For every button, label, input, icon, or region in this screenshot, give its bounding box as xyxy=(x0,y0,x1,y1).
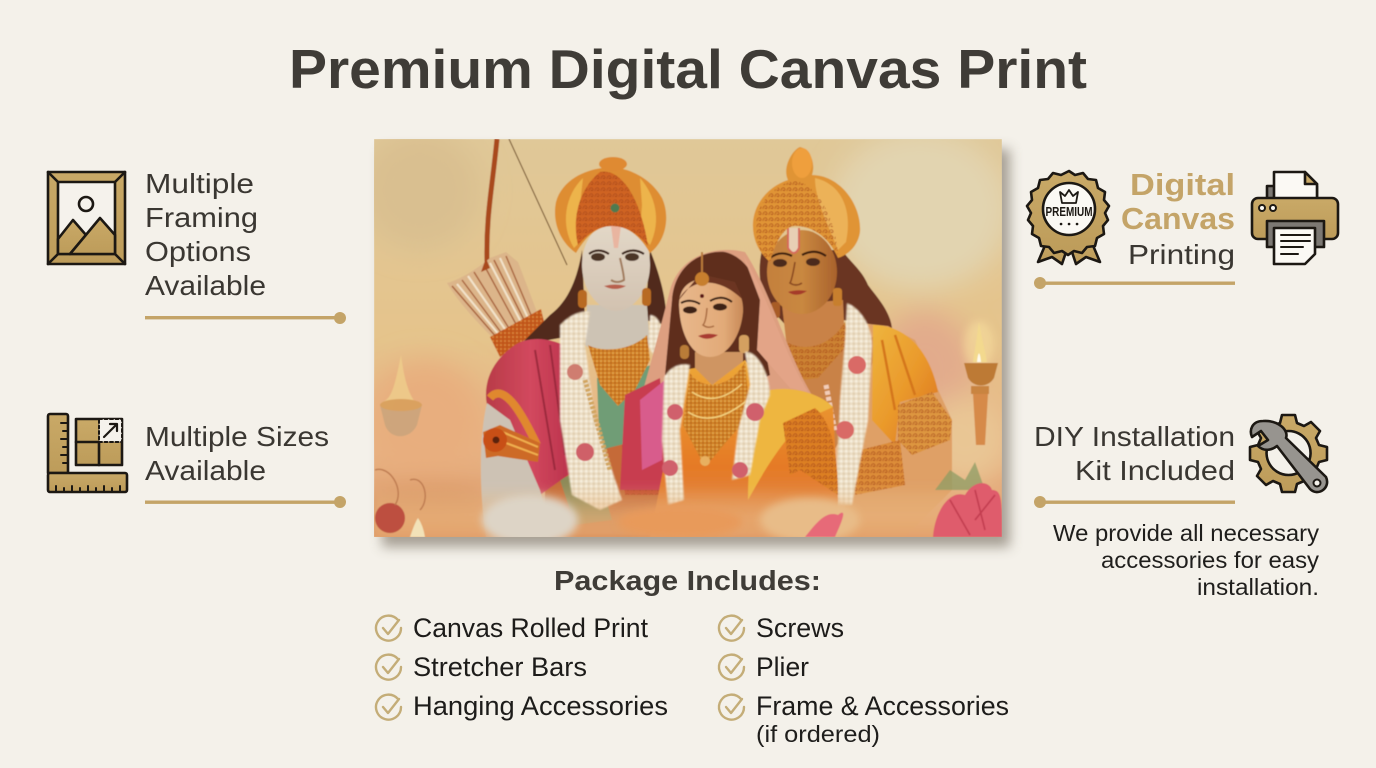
painting: centre figure xyxy=(620,250,838,537)
connector line xyxy=(145,312,346,324)
painting: right figure xyxy=(753,147,952,537)
text: digital canvas printing: Canvas xyxy=(1121,201,1235,236)
item: canvas rolled print: Canvas Rolled Print xyxy=(413,613,649,643)
item: frame and accessories: (if ordered) xyxy=(756,721,880,747)
painting: right lamp xyxy=(964,321,998,445)
item: screws: Screws xyxy=(756,613,844,643)
text: multiple sizes available: Available xyxy=(145,455,266,486)
panel: sizes xyxy=(48,414,346,508)
painting: bottom mist and flowers xyxy=(374,462,1002,545)
text: accessories note: We provide all necessary xyxy=(1053,520,1320,546)
connector line xyxy=(1034,277,1235,289)
heading: package includes: Package Includes: xyxy=(554,565,821,596)
text: digital canvas printing: Printing xyxy=(1128,239,1235,270)
icon: ruler and size grid xyxy=(48,414,127,492)
text: multiple framing options: Available xyxy=(145,270,266,301)
icon: printer xyxy=(1252,172,1338,264)
text: accessories note xyxy=(1053,520,1320,600)
connector line xyxy=(145,496,346,508)
item: stretcher bars: Stretcher Bars xyxy=(413,652,587,682)
text: DIY installation kit included: DIY Installation xyxy=(1034,421,1235,452)
text: multiple sizes available xyxy=(145,421,329,486)
item: plier: Plier xyxy=(756,652,809,682)
item: screws xyxy=(719,613,844,643)
text: multiple framing options: Options xyxy=(145,236,251,267)
text: accessories note: installation. xyxy=(1197,574,1319,600)
central painting xyxy=(360,130,1010,545)
checklist left column xyxy=(376,613,668,721)
connector line xyxy=(1034,496,1235,508)
text: DIY installation kit included: Kit Included xyxy=(1075,455,1235,486)
icon: gear and wrench xyxy=(1250,415,1327,492)
icon: premium badge xyxy=(1027,171,1109,264)
painting: quiver of arrows xyxy=(447,252,545,357)
text: multiple framing options: Framing xyxy=(145,202,258,233)
canvas shadow xyxy=(382,149,1010,547)
icon: picture frame xyxy=(48,172,125,264)
text: digital canvas printing: Digital xyxy=(1130,167,1235,202)
item: frame and accessories: Frame & Accessories xyxy=(756,691,1009,721)
panel: package includes xyxy=(376,565,1009,747)
panel: digital canvas printing xyxy=(1027,167,1338,289)
item: frame and accessories xyxy=(719,691,1009,747)
text: multiple framing options xyxy=(145,168,266,301)
painting: bow xyxy=(487,139,567,265)
panel: framing options xyxy=(48,168,346,324)
checklist right column xyxy=(719,613,1009,747)
text: accessories note: accessories for easy xyxy=(1101,547,1320,573)
painting: left lamp xyxy=(380,355,422,436)
text: multiple sizes available: Multiple Sizes xyxy=(145,421,329,452)
item: plier xyxy=(719,652,809,682)
title: Premium Digital Canvas Print xyxy=(289,38,1087,100)
text: DIY installation kit included xyxy=(1034,421,1235,486)
text: multiple framing options: Multiple xyxy=(145,168,254,199)
icon: premium badge: PREMIUM xyxy=(1046,205,1092,219)
text: digital canvas printing xyxy=(1121,167,1235,270)
painting: left figure xyxy=(481,157,670,537)
item: hanging accessories: Hanging Accessories xyxy=(413,691,668,721)
panel: DIY installation xyxy=(1034,415,1327,600)
